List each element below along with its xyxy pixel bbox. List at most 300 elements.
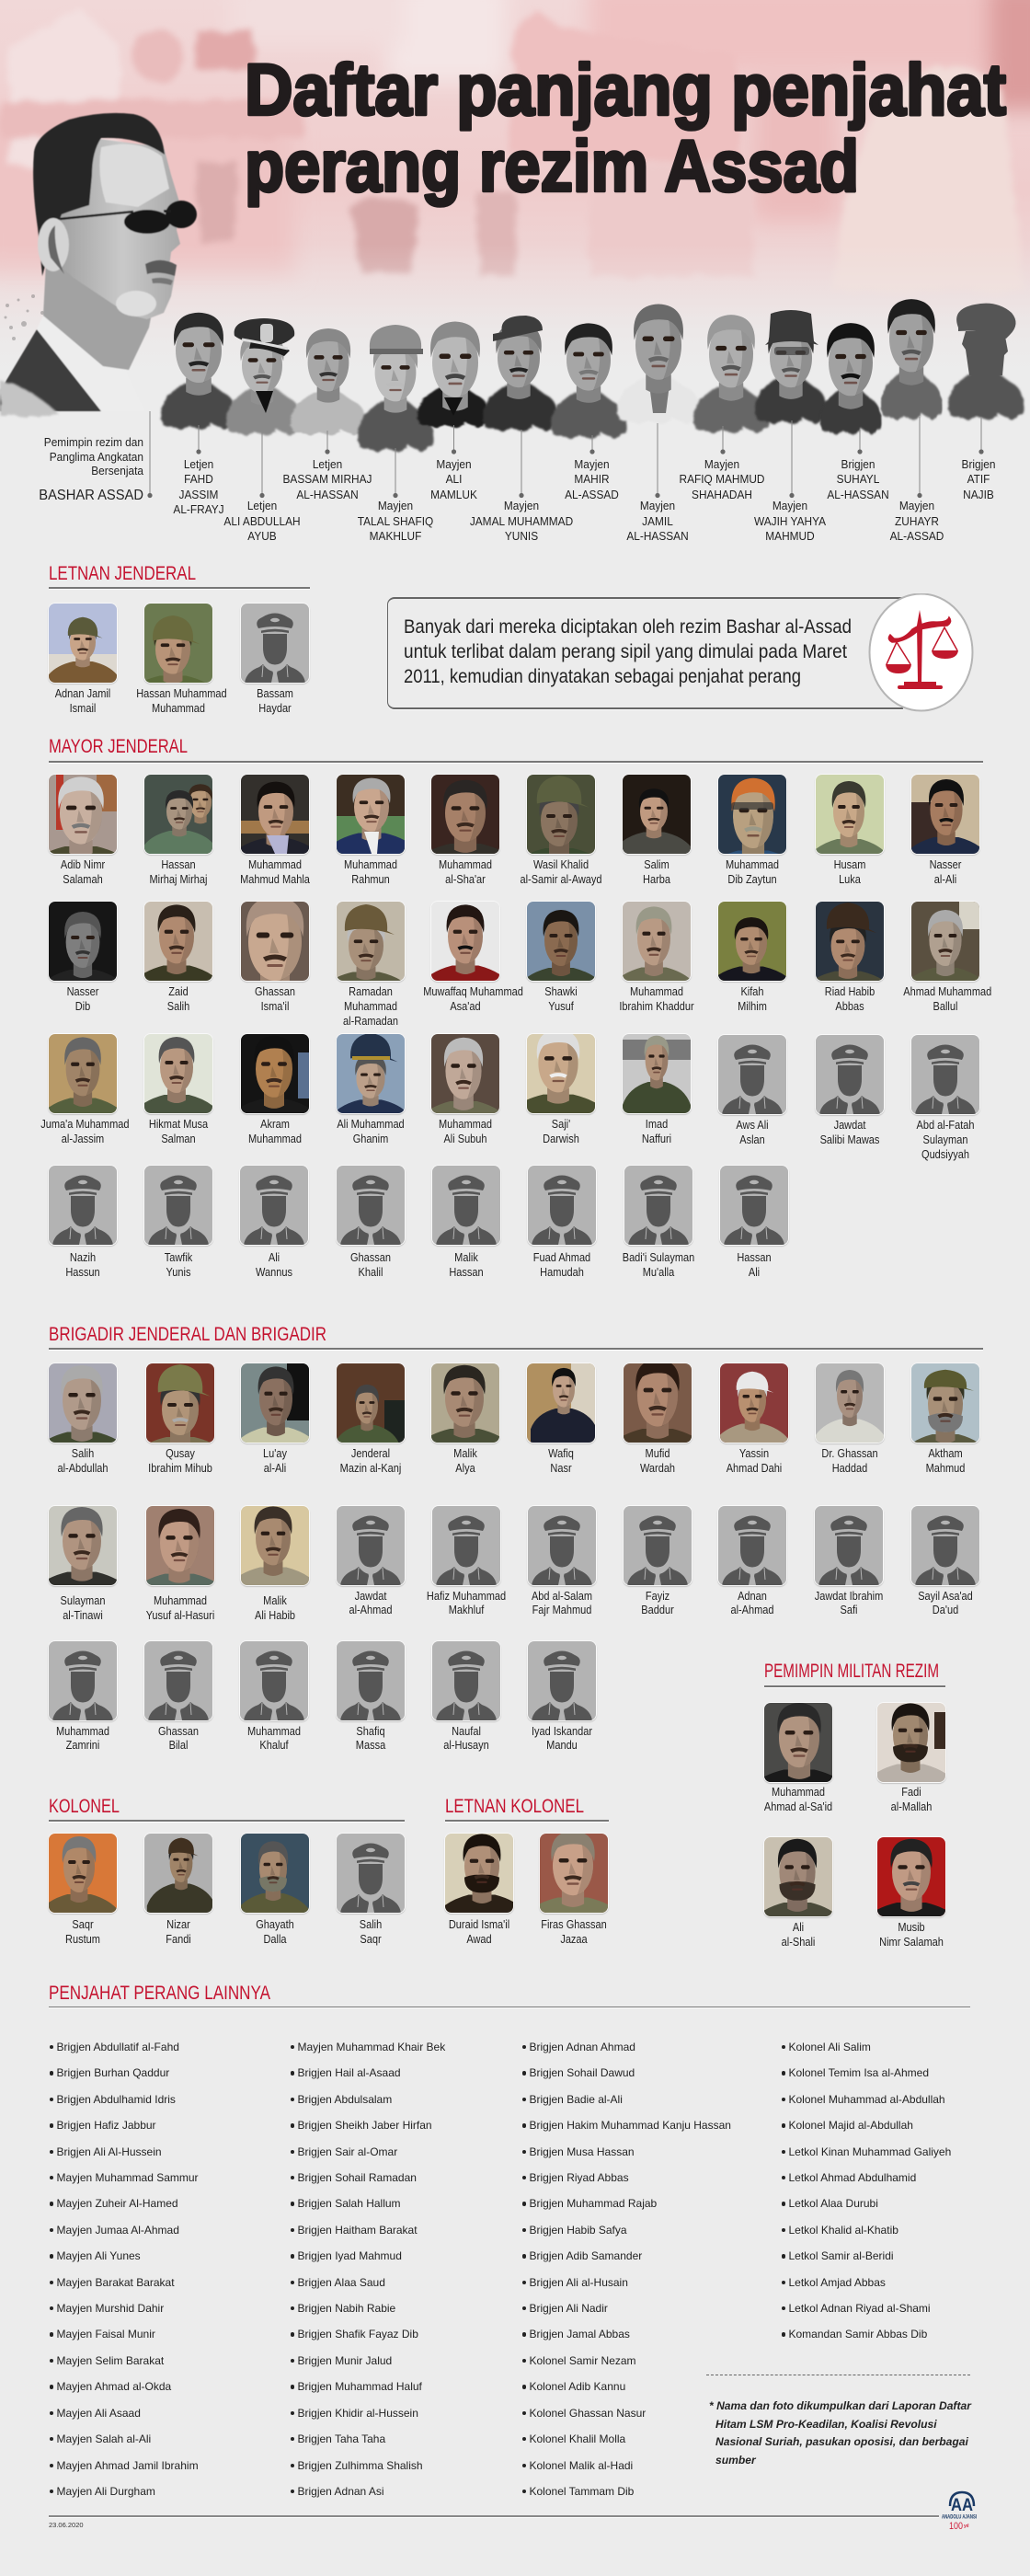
list: column 1: Mayjen Barakat Barakat — [57, 2276, 175, 2289]
leader: Jamal Muhammad Yunis: Mayjen — [504, 500, 539, 512]
person: Firas Ghassan Jazaa: Firas Ghassan — [541, 1918, 607, 1931]
date: 23.06.2020 — [49, 2521, 84, 2529]
person: Ghassan Bilal: Bilal — [169, 1739, 188, 1752]
list: column 3: Kolonel Tammam Dib — [530, 2485, 634, 2498]
person: Dr. Ghassan Haddad: Haddad — [832, 1462, 867, 1475]
list: column 4: Letkol Samir al-Beridi — [789, 2249, 894, 2262]
footnote with dashed rule: Nasional Suriah, pasukan oposisi, dan berbagai — [715, 2435, 968, 2448]
list: column 2: Mayjen Muhammad Khair Bek — [298, 2041, 445, 2053]
person: Salih al-Abdullah — [35, 1363, 131, 1478]
footnote with dashed rule: Hitam LSM Pro-Keadilan, Koalisi Revolusi — [715, 2418, 937, 2431]
person: Abd al-Fatah Sulayman Qudsiyyah: Qudsiyyah — [921, 1148, 969, 1161]
list: column 2: Brigjen Haitham Barakat — [298, 2224, 418, 2237]
person: Hafiz Muhammad Makhluf — [418, 1506, 514, 1620]
leader: Ali Mamluk — [418, 321, 489, 501]
person: Malik Ali Habib: Malik — [263, 1594, 287, 1607]
list: column 2: Brigjen Sair al-Omar — [298, 2145, 397, 2158]
person: Ali Muhammad Ghanim: Ali Muhammad — [337, 1118, 405, 1131]
person: Imad Naffuri: Naffuri — [642, 1133, 671, 1145]
leader: Rafiq Mahmud Shahadah — [680, 315, 769, 501]
person: Fuad Ahmad Hamudah: Fuad Ahmad — [533, 1251, 590, 1264]
person: Saqr Rustum — [35, 1834, 131, 1948]
person: Muhammad Dib Zaytun — [717, 774, 787, 886]
list: column 3: Brigjen Habib Safya — [530, 2224, 627, 2237]
person: Sulayman al-Tinawi: Sulayman — [61, 1594, 105, 1607]
person: Qusay Ibrahim Mihub: Qusay — [166, 1447, 195, 1460]
person: Hassan Ali — [706, 1166, 802, 1280]
logo: Anadolu Ajansi 100 yil: AA — [951, 2496, 973, 2515]
person: Iyad Iskandar Mandu: Mandu — [546, 1739, 578, 1752]
list: column 4: Kolonel Ali Salim — [789, 2041, 871, 2053]
person: Hassan Ali: Ali — [749, 1266, 760, 1279]
person: Muhammad Yusuf al-Hasuri: Muhammad — [154, 1594, 207, 1607]
person: Muhammad Mahmud Mahla: Muhammad — [248, 858, 302, 871]
person: Abd al-Salam Fajr Mahmud: Fajr Mahmud — [532, 1604, 591, 1616]
leader: Bashar Assad portrait and caption: Bersenjata — [91, 465, 143, 477]
person: Wafiq Nasr — [513, 1363, 609, 1478]
person: Jawdat Salibi Mawas: Jawdat — [834, 1119, 865, 1132]
person: Muhammad Yusuf al-Hasuri: Yusuf al-Hasuri — [146, 1609, 214, 1622]
person: Ghassan Khalil: Khalil — [359, 1266, 383, 1279]
list: column 3: Brigjen Musa Hassan — [530, 2145, 635, 2158]
list: column 3: Brigjen Ali Nadir — [530, 2302, 608, 2315]
leader: Mahir al-Assad: AL-ASSAD — [565, 489, 619, 501]
person: Ghassan Bilal: Ghassan — [158, 1725, 199, 1738]
list: column 1: Brigjen Hafiz Jabbur — [57, 2119, 156, 2132]
person: Zaid Salih — [143, 901, 213, 1013]
leader: Ali Mamluk: ALI — [446, 473, 462, 486]
footnote with dashed rule: sumber — [715, 2454, 756, 2467]
person: Riad Habib Abbas — [815, 901, 885, 1013]
leader: Zuhayr al-Assad: ZUHAYR — [895, 515, 939, 528]
list: column 2: Brigjen Salah Hallum — [298, 2197, 401, 2210]
leader: Jamal Muhammad Yunis — [470, 316, 573, 543]
leader: Ali Mamluk: Mayjen — [436, 458, 472, 471]
leader: Fahd Jassim al-Frayj: FAHD — [184, 473, 213, 486]
person: Muhammad al-Sha'ar: al-Sha'ar — [445, 873, 486, 886]
person: Imad Naffuri — [622, 1033, 692, 1145]
person: Wasil Khalid al-Samir al-Awayd: Wasil Khalid — [533, 858, 589, 871]
person: Wafiq Nasr: Nasr — [550, 1462, 572, 1475]
leader: Rafiq Mahmud Shahadah: SHAHADAH — [692, 489, 752, 501]
person: Jawdat Ibrahim Safi — [801, 1506, 897, 1620]
leader: Jamil al-Hassan: JAMIL — [642, 515, 673, 528]
person: Muhammad Zamrini: Zamrini — [66, 1739, 99, 1752]
person: Duraid Isma'il Awad: Duraid Isma'il — [449, 1918, 509, 1931]
leader: Bassam Mirhaj al-Hassan: Letjen — [313, 458, 342, 471]
leader: Wajih Yahya Mahmud: WAJIH YAHYA — [754, 515, 827, 528]
background: ruined city in pink — [0, 0, 1030, 340]
person: Salim Harba: Harba — [643, 873, 670, 886]
person: Saji' Darwish: Saji' — [552, 1118, 570, 1131]
leader: Suhayl al-Hassan: SUHAYL — [837, 473, 880, 486]
person: Muwaffaq Muhammad Asa'ad: Muwaffaq Muhammad — [423, 985, 523, 998]
list: column 3: Brigjen Hakim Muhammad Kanju Hassan — [530, 2119, 731, 2132]
person: Jenderal Mazin al-Kanj: Jenderal — [351, 1447, 390, 1460]
person: Firas Ghassan Jazaa: Jazaa — [560, 1933, 588, 1946]
person: Ghassan Isma'il: Ghassan — [255, 985, 295, 998]
person: Sayil Asa'ad Da'ud — [898, 1506, 993, 1620]
logo: Anadolu Ajansi 100 yil: yıl — [964, 2524, 969, 2529]
person: Muwaffaq Muhammad Asa'ad — [423, 901, 523, 1013]
person: Sulayman al-Tinawi — [35, 1506, 131, 1620]
person: Naufal al-Husayn — [418, 1641, 514, 1755]
person: Nazih Hassun: Hassun — [65, 1266, 100, 1279]
person: Ahmad Muhammad Ballul — [903, 901, 991, 1013]
leader: Suhayl al-Hassan: AL-HASSAN — [827, 489, 889, 501]
leaders portrait strip — [0, 112, 1026, 543]
person: Adib Nimr Salamah — [48, 774, 118, 886]
list: column 3: Brigjen Badie al-Ali — [530, 2093, 623, 2106]
person: Hassan Muhammad Muhammad: Hassan Muhammad — [136, 687, 227, 700]
person: Jenderal Mazin al-Kanj: Mazin al-Kanj — [340, 1462, 401, 1475]
logo: Anadolu Ajansi 100 yil — [938, 2488, 980, 2532]
person: Malik Ali Habib — [227, 1506, 323, 1620]
person: Ramadan Muhammad al-Ramadan: al-Ramadan — [343, 1015, 398, 1028]
footnote with dashed rule: * Nama dan foto dikumpulkan dari Laporan Daftar — [709, 2399, 971, 2412]
person: Aws Ali Aslan: Aslan — [739, 1133, 765, 1146]
list: column 1: Mayjen Murshid Dahir — [57, 2302, 164, 2315]
person: Salim Harba: Salim — [644, 858, 670, 871]
person: Muhammad Ibrahim Khaddur — [619, 901, 694, 1013]
callout: war crimes statement: 2011, kemudian dinyatakan sebagai penjahat perang — [404, 666, 801, 687]
person: Akram Muhammad: Akram — [260, 1118, 290, 1131]
person: Malik Alya — [418, 1363, 513, 1478]
list: column 3: Kolonel Khalil Molla — [530, 2432, 625, 2445]
person: Muhammad Khaluf: Khaluf — [259, 1739, 289, 1752]
person: Jawdat al-Ahmad — [323, 1506, 418, 1620]
leader: Talal Shafiq Makhluf: MAKHLUF — [370, 530, 421, 543]
leader: Suhayl al-Hassan: Brigjen — [841, 458, 875, 471]
person: Ghassan Isma'il — [239, 901, 311, 1013]
person: Nasser al-Ali — [910, 774, 980, 886]
list: column 2: Brigjen Sohail Ramadan — [298, 2171, 417, 2184]
list: column 3: Brigjen Muhammad Rajab — [530, 2197, 657, 2210]
person: Muhammad Ahmad al-Sa'id — [750, 1703, 846, 1817]
person: Muhammad Khaluf: Muhammad — [247, 1725, 301, 1738]
callout: war crimes statement: untuk terlibat dalam perang sipil yang dimulai pada Maret — [404, 641, 847, 662]
list: column 3: Kolonel Malik al-Hadi — [530, 2458, 633, 2471]
title — [245, 51, 1007, 208]
person: Muhammad Ibrahim Khaddur: Ibrahim Khaddur — [619, 1000, 694, 1013]
person: Yassin Ahmad Dahi — [706, 1363, 802, 1478]
person: Sayil Asa'ad Da'ud: Sayil Asa'ad — [918, 1590, 973, 1603]
list: column 4: Komandan Samir Abbas Dib — [789, 2328, 927, 2340]
person: Hikmat Musa Salman: Salman — [161, 1133, 196, 1145]
person: Ghayath Dalla: Ghayath — [256, 1918, 294, 1931]
list: column 3: Kolonel Adib Kannu — [530, 2380, 625, 2393]
person: Aktham Mahmud: Aktham — [928, 1447, 963, 1460]
person: Adnan Jamil Ismail: Ismail — [70, 702, 96, 715]
person: Kifah Milhim: Milhim — [738, 1000, 767, 1013]
list: column 1: Mayjen Ali Asaad — [57, 2407, 141, 2420]
list: column 3: Brigjen Riyad Abbas — [530, 2171, 629, 2184]
list: column 2: Brigjen Taha Taha — [298, 2432, 385, 2445]
person: Muhammad Rahmun — [335, 774, 406, 886]
person: Muhammad Rahmun: Rahmun — [351, 873, 390, 886]
list: column 4: Kolonel Temim Isa al-Ahmed — [789, 2066, 929, 2079]
person: Shawki Yusuf: Shawki — [544, 985, 578, 998]
person: Adib Nimr Salamah: Salamah — [63, 873, 103, 886]
person: Bassam Haydar: Haydar — [258, 702, 292, 715]
leader: Bashar Assad portrait and caption: Pemimpin rezim dan — [44, 436, 143, 449]
list: column 4: Letkol Kinan Muhammad Galiyeh — [789, 2145, 951, 2158]
list: column 4: Letkol Alaa Durubi — [789, 2197, 878, 2210]
leader: Jamal Muhammad Yunis: YUNIS — [505, 530, 538, 543]
list: column 2: Brigjen Abdulsalam — [298, 2093, 392, 2106]
person: Muhammad al-Sha'ar — [430, 774, 500, 886]
list: column 1: Mayjen Ahmad Jamil Ibrahim — [57, 2458, 199, 2471]
list: column 4: Letkol Adnan Riyad al-Shami — [789, 2302, 931, 2315]
person: Zaid Salih: Zaid — [168, 985, 189, 998]
footnote with dashed rule — [706, 2375, 970, 2471]
person: Adib Nimr Salamah: Adib Nimr — [61, 858, 105, 871]
person: Hassan Mirhaj Mirhaj: Hassan — [161, 858, 196, 871]
person: Ghassan Bilal — [131, 1641, 226, 1755]
person: Muhammad al-Sha'ar: Muhammad — [439, 858, 492, 871]
person: Adnan Jamil Ismail: Adnan Jamil — [55, 687, 110, 700]
person: Saji' Darwish — [526, 1033, 596, 1145]
person: Muhammad Ali Subuh: Ali Subuh — [443, 1133, 487, 1145]
person: Muhammad Mahmud Mahla — [239, 774, 311, 886]
person: Nasser al-Ali: al-Ali — [934, 873, 956, 886]
leader: Fahd Jassim al-Frayj: Letjen — [184, 458, 213, 471]
person: Hassan Muhammad Muhammad — [136, 603, 227, 715]
person: Hassan Muhammad Muhammad: Muhammad — [152, 702, 205, 715]
person: Nasser Dib: Nasser — [67, 985, 98, 998]
person: Duraid Isma'il Awad — [431, 1834, 527, 1948]
leader: Talal Shafiq Makhluf — [358, 325, 433, 543]
person: Juma'a Muhammad al-Jassim: al-Jassim — [62, 1133, 104, 1145]
person: Hassan Mirhaj Mirhaj — [143, 774, 213, 886]
person: Tawfik Yunis: Yunis — [166, 1266, 190, 1279]
list: column 1: Mayjen Faisal Munir — [57, 2328, 155, 2340]
person: Tawfik Yunis — [131, 1166, 226, 1280]
person: Muhammad Dib Zaytun: Muhammad — [726, 858, 779, 871]
person: Malik Ali Habib: Ali Habib — [255, 1609, 295, 1622]
person: Badi'i Sulayman Mu'alla: Mu'alla — [643, 1266, 674, 1279]
person: Fayiz Baddur: Baddur — [641, 1604, 674, 1616]
person: Iyad Iskandar Mandu: Iyad Iskandar — [532, 1725, 592, 1738]
person: Nasser Dib: Dib — [75, 1000, 90, 1013]
person: Mufid Wardah: Wardah — [640, 1462, 675, 1475]
person: Riad Habib Abbas: Riad Habib — [825, 985, 875, 998]
leader: Ali Abdullah Ayub: AYUB — [247, 530, 277, 543]
person: Malik Hassan — [418, 1166, 514, 1280]
callout: war crimes statement — [387, 593, 973, 712]
list: column 2: Brigjen Nabih Rabie — [298, 2302, 395, 2315]
person: Adnan al-Ahmad — [704, 1506, 800, 1620]
person: Malik Alya: Alya — [455, 1462, 475, 1475]
list: column 4 — [789, 2034, 951, 2348]
person: Adnan al-Ahmad: al-Ahmad — [730, 1604, 774, 1616]
leader: Atif Najib silhouette: ATIF — [967, 473, 990, 486]
person: Hassan Mirhaj Mirhaj: Mirhaj Mirhaj — [150, 873, 207, 886]
person: Shawki Yusuf: Yusuf — [548, 1000, 574, 1013]
person: Shafiq Massa — [323, 1641, 418, 1755]
person: Lu'ay al-Ali: al-Ali — [264, 1462, 286, 1475]
leader: Mahir al-Assad — [551, 323, 626, 501]
person: Shafiq Massa: Massa — [356, 1739, 385, 1752]
list: column 2 — [298, 2034, 445, 2504]
leader: Wajih Yahya Mahmud: MAHMUD — [765, 530, 815, 543]
list: column 1: Mayjen Ahmad al-Okda — [57, 2380, 171, 2393]
person: Sayil Asa'ad Da'ud: Da'ud — [933, 1604, 958, 1616]
leader: Jamal Muhammad Yunis: JAMAL MUHAMMAD — [470, 515, 573, 528]
person: Aws Ali Aslan — [717, 1034, 787, 1146]
leader: Talal Shafiq Makhluf: Mayjen — [378, 500, 413, 512]
person: Ali al-Shali: al-Shali — [782, 1936, 815, 1949]
person: Ghayath Dalla: Dalla — [263, 1933, 287, 1946]
person: Kifah Milhim: Kifah — [740, 985, 764, 998]
person: Shafiq Massa: Shafiq — [356, 1725, 385, 1738]
leader: Ali Mamluk: MAMLUK — [430, 489, 477, 501]
leader: Talal Shafiq Makhluf: TALAL SHAFIQ — [358, 515, 433, 528]
person: Muwaffaq Muhammad Asa'ad: Asa'ad — [450, 1000, 481, 1013]
list: column 3: Brigjen Adnan Ahmad — [530, 2041, 635, 2053]
person: Wafiq Nasr: Wafiq — [548, 1447, 574, 1460]
person: Hafiz Muhammad Makhluf: Hafiz Muhammad — [427, 1590, 506, 1603]
leader: Mahir al-Assad: MAHIR — [574, 473, 610, 486]
person: Firas Ghassan Jazaa — [526, 1834, 622, 1948]
person: Jenderal Mazin al-Kanj — [323, 1363, 418, 1478]
person: Shawki Yusuf — [526, 901, 596, 1013]
person: Salih Saqr: Salih — [360, 1918, 382, 1931]
person: Ali Muhammad Ghanim — [335, 1033, 406, 1145]
person: Muhammad Ibrahim Khaddur: Muhammad — [630, 985, 683, 998]
person: Salih al-Abdullah: Salih — [72, 1447, 94, 1460]
person: Ghassan Khalil: Ghassan — [350, 1251, 391, 1264]
person: Salim Harba — [622, 774, 692, 886]
leader: Bashar Assad portrait and caption: Panglima Angkatan — [50, 451, 143, 464]
person: Sulayman al-Tinawi: al-Tinawi — [63, 1609, 103, 1622]
list: column 3: Brigjen Sohail Dawud — [530, 2066, 635, 2079]
person: Nasser Dib — [48, 901, 118, 1013]
leader: Bashar Assad portrait and caption: BASHAR ASSAD — [39, 488, 143, 503]
list: column 4: Kolonel Majid al-Abdullah — [789, 2119, 913, 2132]
person: Muhammad Yusuf al-Hasuri — [132, 1506, 228, 1620]
leader: Bassam Mirhaj al-Hassan: AL-HASSAN — [296, 489, 359, 501]
person: Adnan al-Ahmad: Adnan — [738, 1590, 767, 1603]
person: Muhammad Khaluf — [226, 1641, 322, 1755]
list: column 2: Brigjen Shafik Fayaz Dib — [298, 2328, 418, 2340]
person: Hikmat Musa Salman — [143, 1033, 213, 1145]
list: column 1: Brigjen Abdullatif al-Fahd — [57, 2041, 179, 2053]
person: Bassam Haydar — [239, 603, 311, 715]
leader: Ali Abdullah Ayub: Letjen — [247, 500, 277, 512]
person: Ali Wannus: Wannus — [256, 1266, 292, 1279]
leader: Fahd Jassim al-Frayj — [161, 313, 236, 516]
leader: Bassam Mirhaj al-Hassan: BASSAM MIRHAJ — [283, 473, 372, 486]
person: Fadi al-Mallah — [864, 1703, 959, 1817]
person: Muhammad Dib Zaytun: Dib Zaytun — [727, 873, 777, 886]
footer rule — [49, 2515, 939, 2517]
person: Abd al-Salam Fajr Mahmud — [514, 1506, 610, 1620]
list: column 1: Brigjen Abdulhamid Idris — [57, 2093, 176, 2106]
person: Aws Ali Aslan: Aws Ali — [736, 1119, 769, 1132]
list: column 1: Mayjen Zuheir Al-Hamed — [57, 2197, 178, 2210]
person: Malik Hassan: Malik — [454, 1251, 478, 1264]
person: Nasser al-Ali: Nasser — [930, 858, 961, 871]
person: Husam Luka: Luka — [839, 873, 861, 886]
person: Dr. Ghassan Haddad: Dr. Ghassan — [821, 1447, 878, 1460]
leader: Jamil al-Hassan: AL-HASSAN — [626, 530, 689, 543]
person: Hafiz Muhammad Makhluf: Makhluf — [449, 1604, 484, 1616]
person: Abd al-Fatah Sulayman Qudsiyyah: Sulayman — [923, 1133, 967, 1146]
person: Fuad Ahmad Hamudah: Hamudah — [540, 1266, 584, 1279]
person: Jawdat Ibrahim Safi: Safi — [841, 1604, 857, 1616]
person: Juma'a Muhammad al-Jassim: Juma'a Muhammad — [40, 1118, 129, 1131]
list: column 1: Mayjen Muhammad Sammur — [57, 2171, 199, 2184]
person: Lu'ay al-Ali: Lu'ay — [263, 1447, 287, 1460]
person: Naufal al-Husayn: Naufal — [452, 1725, 481, 1738]
leader: Bassam Mirhaj al-Hassan — [283, 328, 372, 501]
person: Akram Muhammad: Muhammad — [248, 1133, 302, 1145]
person: Ghayath Dalla — [227, 1834, 323, 1948]
person: Qusay Ibrahim Mihub: Ibrahim Mihub — [148, 1462, 212, 1475]
list: column 2: Brigjen Alaa Saud — [298, 2276, 385, 2289]
person: Ramadan Muhammad al-Ramadan: Ramadan — [349, 985, 393, 998]
person: Riad Habib Abbas: Abbas — [835, 1000, 864, 1013]
list: column 1: Mayjen Ali Durgham — [57, 2485, 155, 2498]
person: Dr. Ghassan Haddad — [802, 1363, 898, 1478]
leader: Suhayl al-Hassan — [820, 323, 889, 501]
leader: Atif Najib silhouette: Brigjen — [962, 458, 995, 471]
person: Wasil Khalid al-Samir al-Awayd: al-Samir al-Awayd — [520, 873, 602, 886]
person: Qusay Ibrahim Mihub — [132, 1363, 228, 1478]
list: column 1: Mayjen Salah al-Ali — [57, 2432, 151, 2445]
leader: Wajih Yahya Mahmud: Mayjen — [772, 500, 807, 512]
person: Jawdat al-Ahmad: al-Ahmad — [349, 1604, 393, 1616]
person: Ahmad Muhammad Ballul: Ballul — [933, 1000, 957, 1013]
person: Adnan Jamil Ismail — [48, 603, 118, 715]
list: column 1: Brigjen Ali Al-Hussein — [57, 2145, 162, 2158]
list: column 3: Kolonel Samir Nezam — [530, 2354, 636, 2367]
person: Salih Saqr — [323, 1834, 418, 1948]
person: Badi'i Sulayman Mu'alla: Badi'i Sulayman — [623, 1251, 694, 1264]
person: Muhammad Ali Subuh — [430, 1033, 500, 1145]
person: Yassin Ahmad Dahi: Yassin — [739, 1447, 769, 1460]
list: column 3: Brigjen Adib Samander — [530, 2249, 642, 2262]
list: column 3 — [530, 2034, 731, 2504]
person: Muhammad Zamrini: Muhammad — [56, 1725, 109, 1738]
leader: Atif Najib silhouette — [948, 304, 1024, 501]
leader: Zuhayr al-Assad: AL-ASSAD — [890, 530, 944, 543]
person: Fayiz Baddur — [610, 1506, 705, 1620]
person: Musib Nimr Salamah — [864, 1837, 959, 1951]
person: Nizar Fandi — [131, 1834, 226, 1948]
list: column 2: Brigjen Khidir al-Hussein — [298, 2407, 418, 2420]
list: column 3: Brigjen Ali al-Husain — [530, 2276, 628, 2289]
person: Ramadan Muhammad al-Ramadan: Muhammad — [344, 1000, 397, 1013]
person: Saji' Darwish: Darwish — [543, 1133, 579, 1145]
leader: Bashar Assad portrait and caption — [0, 113, 197, 503]
person: Ali al-Shali — [750, 1837, 846, 1951]
leader: Jamil al-Hassan — [617, 304, 700, 543]
leader: Fahd Jassim al-Frayj: JASSIM — [179, 489, 218, 501]
list: column 3: Brigjen Jamal Abbas — [530, 2328, 630, 2340]
person: Jawdat al-Ahmad: Jawdat — [355, 1590, 386, 1603]
list: column 4: Letkol Ahmad Abdulhamid — [789, 2171, 916, 2184]
person: Muhammad Ahmad al-Sa'id: Muhammad — [772, 1786, 825, 1799]
icon: scales of justice — [870, 594, 973, 710]
person: Ali Wannus — [226, 1166, 322, 1280]
leader: Ali Abdullah Ayub: ALI ABDULLAH — [223, 515, 301, 528]
logo: Anadolu Ajansi 100 yil: 100 — [949, 2521, 963, 2532]
person: Musib Nimr Salamah: Musib — [898, 1921, 925, 1934]
leader: Jamil al-Hassan: Mayjen — [640, 500, 675, 512]
person: Ghassan Khalil — [323, 1166, 418, 1280]
